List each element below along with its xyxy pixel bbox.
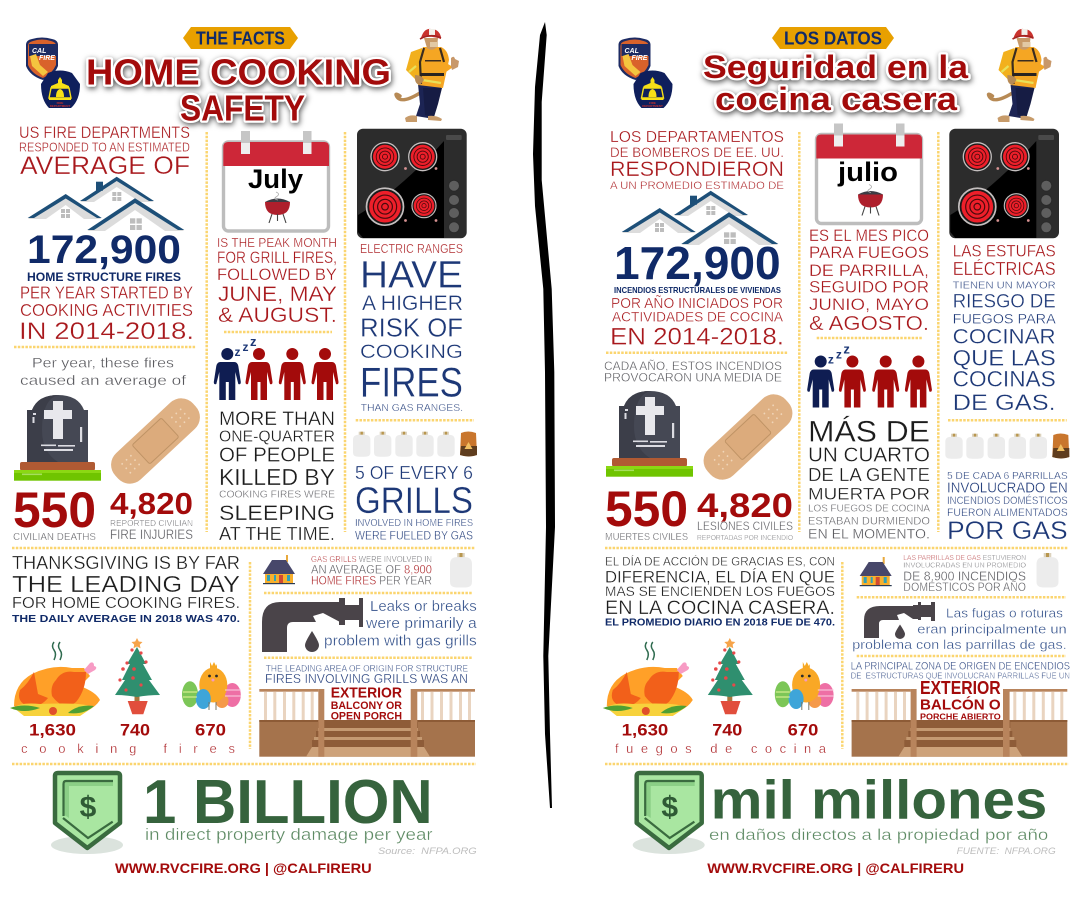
icon: houses (622, 191, 778, 245)
text: más de un cuarto: DE LA GENTE (808, 465, 930, 485)
text: Thanksgiving: FOR HOME COOKING FIRES. (12, 595, 240, 612)
text: electric ranges: THAN GAS RANGES. (361, 402, 463, 414)
stat: 1 billion: in direct property damage per year (145, 826, 433, 844)
stat: fire injuries: FIRE INJURIES (110, 526, 193, 542)
text: peak month (217, 236, 337, 327)
text: los departamentos: DE BOMBEROS DE EE. UU. (610, 144, 784, 160)
text: por año: ACTIVIDADES DE COCINA (612, 309, 784, 325)
text: las estufas: LAS ESTUFAS (953, 242, 1056, 261)
text: more than one-quarter: COOKING FIRES WERE (219, 490, 335, 501)
icon: electric stove (357, 129, 467, 238)
text: las fugas o roturas: problema con las parrillas de gas. (852, 637, 1067, 652)
text: las fugas o roturas: eran principalmente un (917, 621, 1067, 636)
icon: Easter chick and eggs (775, 662, 834, 710)
text: las estufas: ELÉCTRICAS (953, 259, 1056, 279)
icon: mascot firefighter (988, 29, 1052, 122)
footer links: WWW.RVCFIRE.ORG | @CALFIRERU (115, 860, 372, 876)
text: more than one-quarter: AT THE TIME. (219, 524, 335, 544)
text: exterior balcony: BALCONY OR (331, 700, 402, 712)
numbers: fuegos de cocina: 1,630 (622, 721, 668, 740)
text: 5 de cada 6: POR GAS (947, 517, 1068, 545)
text: es el mes pico: SEGUIDO POR (809, 278, 929, 297)
center divider: brush stroke (533, 22, 555, 808)
icon: mascot firefighter (396, 29, 459, 122)
text: US fire departments: AVERAGE OF (20, 152, 190, 180)
text: leading area of origin: FIRES INVOLVING GRILLS WAS AN (265, 671, 468, 686)
text: per year these fires (20, 355, 186, 388)
numbers: fuegos de cocina: fuegos de cocina (615, 741, 827, 756)
icon: leaking pipe (262, 598, 363, 652)
text: gas grills involved: GAS GRILLS WERE INVOLVED IN (311, 554, 432, 564)
icon: gas tanks and charcoal (945, 434, 1069, 459)
title: Seguridad en la (703, 49, 968, 85)
stat: 172,900: 172,900 (614, 237, 781, 289)
text: más de un cuarto (808, 416, 930, 541)
text: 5 of every 6 grills: INVOLVED IN HOME FIRES (355, 517, 473, 529)
text: cada año (604, 360, 782, 385)
text: exterior balcón (920, 678, 1001, 721)
stat: fire injuries: REPORTED CIVILIAN (110, 518, 193, 528)
text: es el mes pico: ES EL MES PICO (809, 227, 929, 245)
icon: porch (259, 689, 475, 757)
icon: gas tank (1037, 553, 1058, 588)
footer links: WWW.RVCFIRE.ORG | @CALFIRERU (707, 860, 964, 876)
text: leaks or breaks (324, 599, 478, 650)
text: más de un cuarto: UN CUARTO (808, 445, 930, 467)
text: electric ranges: COOKING (360, 342, 463, 363)
stat: lesiones civiles (697, 487, 793, 542)
title: SAFETY (180, 88, 305, 129)
text: electric ranges: A HIGHER (362, 292, 463, 315)
numbers: fuegos de cocina (615, 721, 827, 756)
numbers: cooking fires by holiday: cooking fires (21, 741, 236, 756)
text: por año (610, 295, 784, 350)
text: per year these fires: Per year, these fires (32, 355, 174, 371)
title (86, 52, 391, 129)
text: more than one-quarter: MORE THAN (219, 409, 335, 430)
text: día de acción de gracias: MAS SE ENCIENDEN LOS FUEGOS (605, 583, 835, 599)
text: 5 of every 6 grills (355, 463, 473, 542)
badge: los datos: LOS DATOS (784, 28, 882, 48)
text: Thanksgiving (12, 553, 240, 625)
icon: turkey (10, 642, 100, 716)
text: peak month: FOR GRILL FIRES, (217, 249, 337, 267)
text: leading area of origin (265, 664, 468, 686)
title: HOME COOKING (86, 52, 391, 93)
text: las estufas: COCINAS (953, 367, 1056, 392)
text: peak month: FOLLOWED BY (217, 265, 337, 284)
text: las parrillas de gas: DOMÉSTICOS POR AÑO (903, 579, 1026, 594)
logos: Cal Fire and Riverside County (618, 38, 672, 108)
text: exterior balcón: PORCHE ABIERTO (920, 711, 1001, 721)
text: por año: EN 2014-2018. (610, 323, 784, 350)
text: leaks or breaks: were primarily a (365, 616, 478, 632)
text: per year: IN 2014-2018. (19, 318, 194, 345)
text: las estufas: RIESGO DE (953, 291, 1056, 312)
icon: electric stove (949, 129, 1059, 238)
text: electric ranges: RISK OF (360, 313, 463, 343)
stat: fire injuries (110, 486, 193, 542)
text: más de un cuarto: ESTABAN DURMIENDO (808, 515, 930, 527)
text: Thanksgiving: THANKSGIVING IS BY FAR (12, 553, 240, 573)
text: exterior balcony: OPEN PORCH (331, 711, 402, 723)
text: las estufas: TIENEN UN MAYOR (953, 280, 1056, 292)
stat: muertes civiles: 550 (605, 481, 688, 537)
text: US fire departments: RESPONDED TO AN ESTIMATED (19, 139, 190, 154)
text: las fugas o roturas: Las fugas o roturas (946, 606, 1064, 621)
text: día de acción de gracias: EN LA COCINA CASERA. (605, 598, 835, 619)
stat: 172,900: INCENDIOS ESTRUCTURALES DE VIVIENDAS (614, 285, 781, 295)
text: 5 de cada 6: FUERON ALIMENTADOS (947, 507, 1068, 519)
icon: calendar July: July (248, 164, 303, 194)
text: los departamentos: LOS DEPARTAMENTOS (610, 129, 784, 146)
stat: fire injuries: 4,820 (110, 486, 193, 521)
numbers: cooking fires by holiday (21, 721, 236, 756)
text: 5 of every 6 grills: GRILLS (355, 480, 473, 521)
text: las parrillas de gas (903, 553, 1026, 594)
text: más de un cuarto: MUERTA POR (808, 484, 930, 503)
text: las estufas: FUEGOS PARA (953, 310, 1056, 326)
text: per year (19, 283, 194, 345)
text: las parrillas de gas: LAS PARRILLAS DE GAS ESTUVIERON (903, 553, 1026, 562)
text: leaks or breaks: problem with gas grills (324, 634, 477, 650)
panel: English infographic (10, 27, 478, 876)
icon: calendar julio: julio (837, 157, 898, 187)
icon: turkey (603, 642, 693, 716)
icon: sleeping people (214, 334, 338, 400)
text: las estufas (953, 242, 1056, 415)
icon: money shield (633, 773, 705, 854)
text: electric ranges (360, 242, 463, 414)
text: gas grills involved (311, 554, 432, 587)
text: exterior balcón: BALCÓN O (920, 695, 1001, 713)
text: more than one-quarter: SLEEPING (219, 502, 335, 525)
text: cada año: PROVOCARON UNA MEDIA DE (604, 373, 782, 385)
title (703, 49, 968, 117)
icon: tombstone (14, 395, 101, 481)
icon: houses (28, 177, 184, 231)
text: es el mes pico: JUNIO, MAYO (809, 295, 929, 314)
text: las estufas: DE GAS. (953, 390, 1056, 415)
text: más de un cuarto: MÁS DE (808, 416, 930, 449)
text: 5 de cada 6: INVOLUCRADO EN (947, 480, 1068, 497)
title: cocina casera (715, 81, 957, 117)
icon: calendar July (223, 131, 329, 231)
text: per year these fires: caused an average of (20, 372, 186, 388)
icon: money shield: $ (661, 791, 678, 824)
stat: lesiones civiles: LESIONES CIVILES (697, 519, 793, 533)
text: more than one-quarter (219, 409, 335, 544)
icon: bandage (697, 388, 799, 486)
text: gas grills involved: AN AVERAGE OF 8,900 (311, 563, 432, 577)
text: es el mes pico: DE PARRILLA, (809, 261, 929, 280)
text: more than one-quarter: OF PEOPLE (219, 445, 335, 467)
source: Source: NFPA.ORG (378, 846, 477, 857)
icon: gas tanks and charcoal (353, 432, 477, 457)
text: cada año: CADA AÑO, ESTOS INCENDIOS (604, 360, 782, 373)
text: por año: POR AÑO INICIADOS POR (611, 295, 783, 312)
icon: Christmas tree (115, 638, 160, 714)
text: US fire departments: US FIRE DEPARTMENTS (19, 124, 190, 142)
text: 5 de cada 6: 5 DE CADA 6 PARRILLAS (947, 470, 1068, 482)
icon: porch (852, 689, 1067, 757)
icon: gas tank (450, 553, 472, 588)
text: las estufas: QUE LAS (953, 346, 1056, 371)
text: exterior balcony: EXTERIOR (331, 685, 402, 702)
icon: calendar julio (816, 124, 922, 224)
logos: Cal Fire and Riverside County (26, 38, 80, 108)
text: día de acción de gracias: EL PROMEDIO DIARIO EN 2018 FUE DE 470. (605, 618, 835, 629)
icon: money shield: $ (80, 791, 97, 824)
text: más de un cuarto: LOS FUEGOS DE COCINA (808, 504, 930, 515)
numbers: cooking fires by holiday: 740 (120, 721, 150, 740)
text: los departamentos: A UN PROMEDIO ESTIMADO DE (610, 180, 784, 192)
stat: 1 billion: 1 BILLION (143, 768, 433, 837)
stat: mil millones: mil millones (711, 768, 1047, 830)
stat: civilian deaths: 550 (13, 482, 96, 538)
text: per year: COOKING ACTIVITIES (20, 300, 193, 320)
badge: the facts: THE FACTS (196, 28, 285, 48)
text: las parrillas de gas: DE 8,900 INCENDIOS (903, 568, 1026, 583)
text: per year: PER YEAR STARTED BY (20, 283, 193, 303)
text: día de acción de gracias: DIFERENCIA, EL DÍA EN QUE (605, 567, 835, 586)
icon: Easter chick and eggs (182, 662, 241, 710)
stat: mil millones: en daños directos a la propiedad por año (709, 827, 1048, 844)
panel: Spanish infographic (603, 27, 1070, 876)
text: Thanksgiving: THE DAILY AVERAGE IN 2018 WAS 470. (12, 613, 240, 625)
text: peak month: JUNE, MAY (218, 283, 337, 306)
text: las parrillas de gas: INVOLUCRADAS EN UN PROMEDIO (903, 561, 1026, 570)
text: es el mes pico: & AGOSTO. (809, 313, 929, 335)
stat: civilian deaths: CIVILIAN DEATHS (13, 531, 96, 543)
icon: small house (860, 557, 892, 586)
icon: money shield (51, 773, 123, 854)
text: es el mes pico: PARA FUEGOS (809, 243, 929, 262)
text: es el mes pico (809, 227, 929, 335)
text: gas grills involved: HOME FIRES PER YEAR (311, 573, 432, 587)
text: US fire departments (19, 124, 190, 180)
numbers: cooking fires by holiday: 1,630 (29, 721, 76, 740)
icon: bandage (104, 392, 207, 490)
text: los departamentos: RESPONDIERON (610, 158, 784, 181)
text: día de acción de gracias (605, 556, 835, 629)
stat: 172,900 home structure fires: 172,900 (27, 228, 181, 272)
stat: lesiones civiles: 4,820 (697, 487, 793, 525)
stat: 172,900 home structure fires: HOME STRUCTURE FIRES (27, 270, 181, 284)
icon: Christmas tree (708, 638, 753, 714)
text: 5 de cada 6 (947, 470, 1068, 545)
text: leaks or breaks: Leaks or breaks (370, 599, 477, 615)
text: electric ranges: HAVE (360, 255, 463, 297)
text: exterior balcón: EXTERIOR (920, 678, 1001, 698)
icon: leaking pipe (864, 602, 935, 639)
text: 5 of every 6 grills: WERE FUELED BY GAS (355, 528, 473, 542)
icon: sleeping people (807, 342, 932, 408)
text: día de acción de gracias: EL DÍA DE ACCIÓN DE GRACIAS ES, CON (605, 556, 835, 569)
text: more than one-quarter: KILLED BY (219, 464, 335, 490)
text: la principal zona: DE ESTRUCTURAS QUE INVOLUCRAN PARRILLAS FUE UN (851, 671, 1070, 680)
stat: lesiones civiles: REPORTADAS POR INCENDIO (697, 533, 793, 542)
text: electric ranges: FIRES (360, 359, 463, 406)
text: more than one-quarter: ONE-QUARTER (219, 429, 335, 446)
text: leading area of origin: THE LEADING AREA OF ORIGIN FOR STRUCTURE (266, 664, 468, 675)
text: peak month: & AUGUST. (218, 304, 337, 327)
icon: tombstone (606, 391, 693, 477)
text: los departamentos (610, 129, 784, 192)
text: peak month: IS THE PEAK MONTH (217, 236, 337, 250)
icon: small house (263, 555, 295, 584)
text: Thanksgiving: THE LEADING DAY (12, 571, 240, 597)
text: electric ranges: ELECTRIC RANGES (360, 242, 463, 256)
text: más de un cuarto: EN EL MOMENTO. (808, 525, 930, 541)
text: 5 of every 6 grills: 5 OF EVERY 6 (355, 463, 473, 483)
numbers: fuegos de cocina: 670 (788, 721, 818, 740)
stat: muertes civiles: MUERTES CIVILES (605, 531, 688, 543)
numbers: fuegos de cocina: 740 (712, 721, 742, 740)
text: exterior balcony (331, 685, 402, 723)
text: las fugas o roturas (852, 606, 1067, 652)
source: FUENTE: NFPA.ORG (957, 846, 1056, 857)
text: la principal zona (851, 660, 1070, 680)
numbers: cooking fires by holiday: 670 (195, 721, 226, 740)
text: las estufas: COCINAR (953, 325, 1056, 348)
